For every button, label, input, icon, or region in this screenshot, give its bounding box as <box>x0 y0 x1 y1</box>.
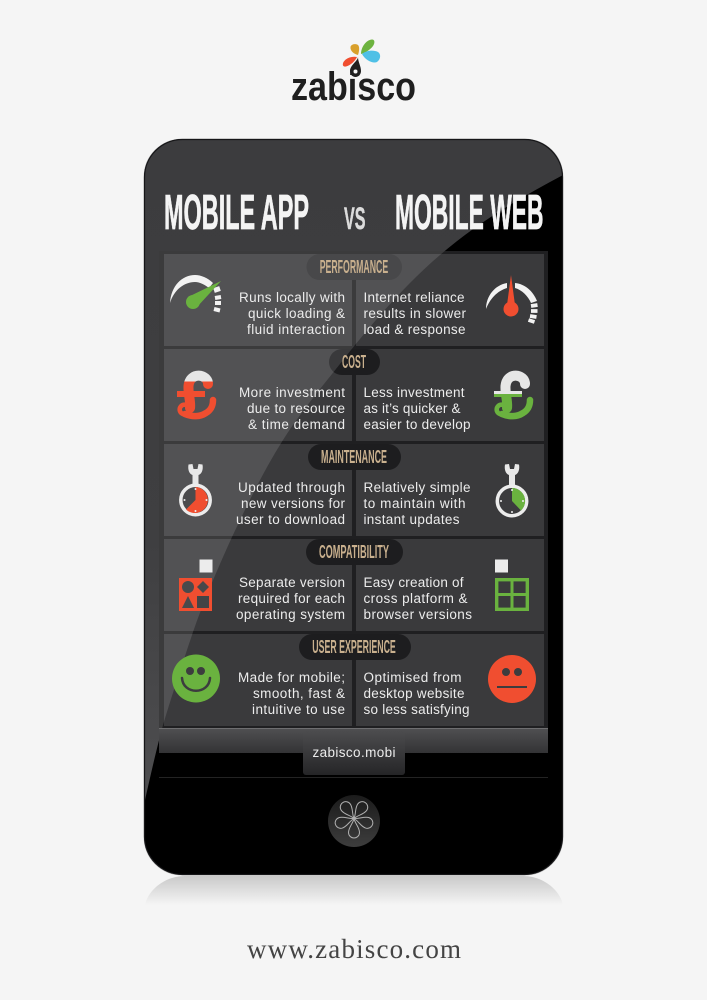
app cost text: & time demand <box>248 417 345 432</box>
app experience text <box>238 670 345 717</box>
logo wordmark: zabisco <box>291 65 416 109</box>
icon: slow gauge <box>486 275 538 322</box>
app compatibility text: required for each <box>238 591 345 606</box>
text: MOBILE WEB <box>395 185 544 240</box>
app cost text: due to resource <box>247 401 345 416</box>
panel: cost <box>159 349 548 444</box>
panel: maintenance: MAINTENANCE <box>321 446 387 467</box>
panel: compatibility <box>159 539 548 634</box>
app compatibility text: Separate version <box>239 575 345 590</box>
app maintenance text <box>236 480 346 527</box>
app maintenance text: new versions for <box>241 496 346 511</box>
web performance text: Internet reliance <box>364 290 464 305</box>
icon: happy face <box>172 654 220 702</box>
icon: neutral face <box>488 655 536 703</box>
app performance text: Runs locally with <box>239 290 345 305</box>
reflection of phone <box>145 876 563 905</box>
web maintenance text <box>364 480 470 527</box>
bottom browser bar <box>159 728 548 778</box>
app maintenance text: Updated through <box>238 480 345 495</box>
panel: performance <box>159 251 548 349</box>
app performance text: quick loading & <box>248 306 345 321</box>
app cost text: More investment <box>239 385 345 400</box>
app compatibility text: operating system <box>236 607 345 622</box>
address tab <box>303 731 405 775</box>
app cost text <box>239 385 345 432</box>
home button <box>328 795 380 847</box>
web maintenance text: Relatively simple <box>364 480 470 495</box>
screen frame <box>159 251 548 728</box>
web experience text: so less satisfying <box>364 702 470 717</box>
app performance text <box>239 290 345 337</box>
web experience text: desktop website <box>364 686 464 701</box>
icon: fast gauge <box>170 275 221 310</box>
app performance text: fluid interaction <box>247 322 345 337</box>
web maintenance text: instant updates <box>364 512 460 527</box>
panel: user experience <box>159 634 548 728</box>
web experience text <box>364 670 470 717</box>
text: MOBILE APP <box>164 185 309 240</box>
phone body <box>140 135 570 875</box>
app maintenance text: user to download <box>236 512 345 527</box>
web experience text: Optimised from <box>364 670 462 685</box>
web compatibility text <box>364 575 472 622</box>
panel: performance: PERFORMANCE <box>320 256 388 277</box>
address tab: zabisco.mobi <box>312 745 396 760</box>
panel: cost: COST <box>342 351 366 372</box>
icon: red shapes <box>179 560 212 611</box>
app experience text: intuitive to use <box>252 702 345 717</box>
app compatibility text <box>236 575 345 622</box>
panel: user experience: USER EXPERIENCE <box>312 636 396 657</box>
heading: vs: VS <box>344 200 366 236</box>
icon: green pound <box>494 376 530 416</box>
web cost text <box>364 385 470 432</box>
logo: zabisco <box>291 40 416 109</box>
web cost text: easier to develop <box>364 417 470 432</box>
web compatibility text: cross platform & <box>364 591 468 606</box>
web performance text: load & response <box>364 322 466 337</box>
icon: flower outline <box>334 799 374 838</box>
web performance text: results in slower <box>364 306 466 321</box>
panel: compatibility: COMPATIBILITY <box>319 541 389 562</box>
gloss reflection <box>140 135 570 815</box>
app experience text: Made for mobile; <box>238 670 345 685</box>
icon: red pound <box>177 376 213 416</box>
icon: logo petals <box>343 40 380 77</box>
icon: red stopwatch <box>181 464 210 515</box>
app experience text: smooth, fast & <box>253 686 345 701</box>
web maintenance text: to maintain with <box>364 496 466 511</box>
web compatibility text: browser versions <box>364 607 472 622</box>
web cost text: Less investment <box>364 385 465 400</box>
footer url: www.zabisco.com <box>247 934 461 964</box>
icon: green grid <box>495 560 528 610</box>
web performance text <box>364 290 466 337</box>
web compatibility text: Easy creation of <box>364 575 464 590</box>
panel: maintenance <box>159 444 548 539</box>
icon: green stopwatch <box>497 464 527 516</box>
web cost text: as it’s quicker & <box>364 401 460 416</box>
